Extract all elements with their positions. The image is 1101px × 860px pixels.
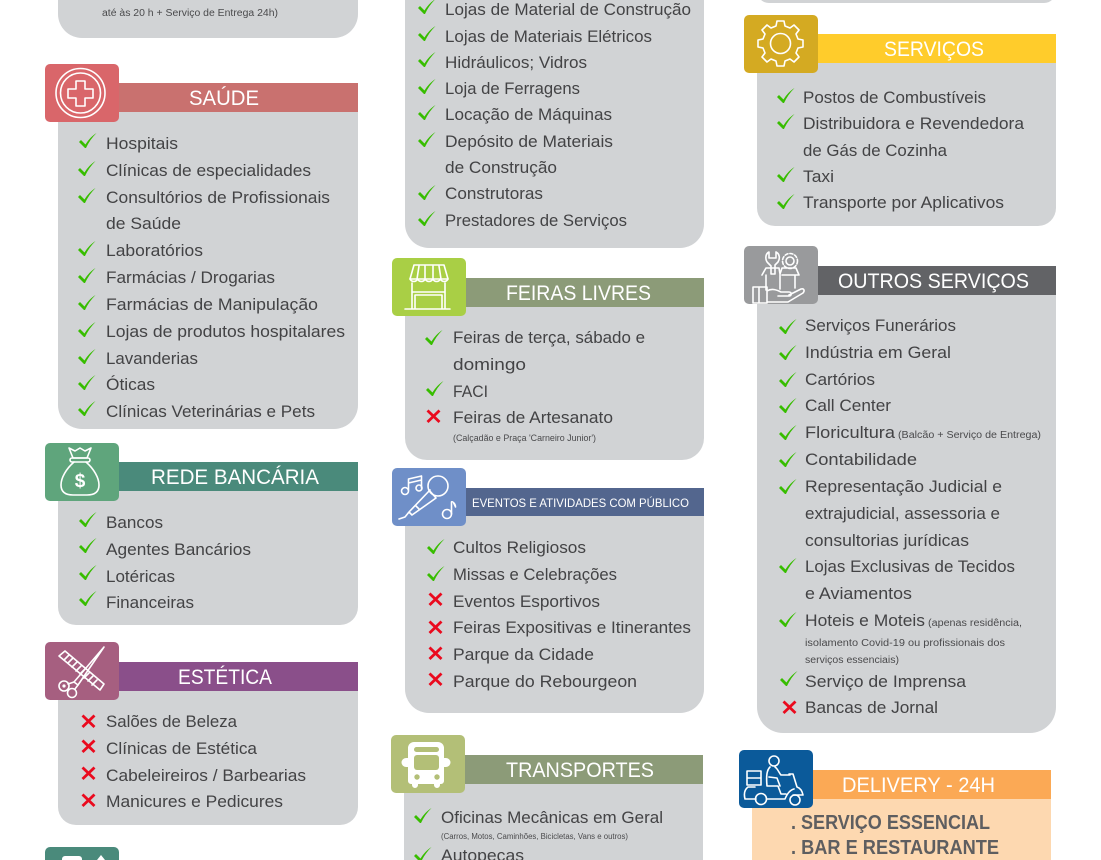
- panel: saúde: [45, 64, 358, 429]
- list: outros serviços items: [779, 316, 1041, 717]
- list: eventos items: [427, 538, 691, 691]
- list: transportes items: (Carros, Motos, Caminhões, Bicicletas, Vans e outros): [441, 832, 628, 841]
- list: outros serviços items: isolamento Covid-19 ou profissionais dos: [805, 638, 1005, 649]
- list: construção items: Loja de Ferragens: [445, 79, 580, 98]
- heading banner: saúde: SAÚDE: [189, 87, 259, 110]
- list: rede bancária items: Financeiras: [106, 593, 194, 612]
- heading banner: rede bancária: [119, 462, 358, 491]
- list: transportes items: [414, 808, 663, 860]
- text: delivery essentials: . SERVIÇO ESSENCIAL: [791, 811, 990, 834]
- panel: top of right column (cropped): [757, 0, 1056, 3]
- list: estética items: Salões de Beleza: [106, 712, 238, 731]
- heading banner: estética: [119, 662, 358, 691]
- list: rede bancária items: Lotéricas: [106, 567, 175, 586]
- icon: scissors and comb: [45, 642, 119, 700]
- list: saúde items: Farmácias de Manipulação: [106, 295, 318, 314]
- panel: transportes: [391, 735, 703, 860]
- list: serviços items: Postos de Combustíveis: [803, 88, 986, 107]
- heading banner: serviços: SERVIÇOS: [884, 38, 984, 61]
- icon: money bag: $: [75, 471, 86, 492]
- text: delivery essentials: [791, 811, 999, 859]
- heading banner: outros serviços: OUTROS SERVIÇOS: [838, 270, 1029, 293]
- panel: eventos: [392, 468, 704, 713]
- list: estética items: Cabeleireiros / Barbearias: [106, 766, 306, 785]
- list: outros serviços items: extrajudicial, assessoria e: [805, 504, 1000, 523]
- list: rede bancária items: [79, 512, 251, 612]
- list: feiras items: (Calçadão e Praça 'Carneiro Junior'): [453, 433, 596, 443]
- heading banner: delivery: [813, 770, 1051, 799]
- list: eventos items: Missas e Celebrações: [453, 565, 617, 584]
- list: saúde items: Farmácias / Drogarias: [106, 268, 275, 287]
- panel: comércio (top of left column): [58, 0, 358, 38]
- list: transportes items: Oficinas Mecânicas em Geral: [441, 808, 663, 827]
- list: construção items: Lojas de Material de Construção: [445, 0, 691, 19]
- list: construção items: Depósito de Materiais: [445, 132, 613, 151]
- list: outros serviços items: Lojas Exclusivas de Tecidos: [805, 557, 1015, 576]
- heading banner: eventos: [466, 488, 704, 516]
- list: feiras items: FACI: [453, 382, 488, 401]
- list: outros serviços items: Indústria em Geral: [805, 343, 951, 362]
- list: outros serviços items: Floricultura: [805, 423, 896, 442]
- list: eventos items: Parque da Cidade: [453, 645, 594, 664]
- list: outros serviços items: Cartórios: [805, 370, 875, 389]
- list: saúde items: Lojas de produtos hospitalares: [106, 322, 345, 341]
- heading banner: rede bancária: REDE BANCÁRIA: [151, 466, 319, 489]
- note: delivery hours: até às 20 h + Serviço de Entrega 24h): [102, 8, 278, 19]
- text: delivery essentials: . BAR E RESTAURANTE: [791, 836, 999, 859]
- panel: feiras livres: [392, 258, 704, 460]
- list: construção items: Construtoras: [445, 184, 543, 203]
- list: saúde items: [78, 133, 345, 421]
- list: estética items: [82, 712, 306, 811]
- list: eventos items: Feiras Expositivas e Itinerantes: [453, 618, 691, 637]
- list: outros serviços items: Hoteis e Moteis: [805, 611, 925, 630]
- list: estética items: Manicures e Pedicures: [106, 792, 283, 811]
- panel: estética: [45, 642, 358, 825]
- list: serviços items: Distribuidora e Revendedora: [803, 114, 1025, 133]
- panel: rede bancária: [45, 443, 358, 625]
- list: outros serviços items: Bancas de Jornal: [805, 698, 938, 717]
- heading banner: saúde: [119, 83, 358, 112]
- list: outros serviços items: Call Center: [805, 396, 891, 415]
- list: construção items: de Construção: [445, 158, 557, 177]
- icon: medical cross: [45, 64, 119, 122]
- panel: construção: [405, 0, 704, 248]
- icon: gear: [744, 15, 818, 73]
- icon: market stall: [392, 258, 466, 316]
- heading banner: estética: ESTÉTICA: [178, 666, 272, 689]
- panel: outros serviços: [744, 246, 1056, 733]
- list: saúde items: Óticas: [106, 375, 155, 394]
- list: saúde items: Clínicas Veterinárias e Pets: [106, 402, 315, 421]
- list: outros serviços items: serviços essenciais): [805, 655, 899, 666]
- list: estética items: Clínicas de Estética: [106, 739, 258, 758]
- list: outros serviços items: Contabilidade: [805, 450, 917, 469]
- panel: serviços: [744, 15, 1056, 226]
- icon: bus: [391, 735, 465, 793]
- list: outros serviços items: e Aviamentos: [805, 584, 912, 603]
- list: serviços items: Taxi: [803, 167, 834, 186]
- heading banner: outros serviços: [818, 266, 1056, 295]
- panel: delivery: [739, 750, 1051, 860]
- heading banner: eventos: EVENTOS E ATIVIDADES COM PÚBLICO: [472, 495, 689, 510]
- list: serviços items: Transporte por Aplicativos: [803, 193, 1004, 212]
- icon: tools box on hand: [744, 246, 818, 304]
- heading banner: transportes: TRANSPORTES: [506, 759, 654, 782]
- list: serviços items: [777, 88, 1025, 212]
- list: serviços items: de Gás de Cozinha: [803, 141, 948, 160]
- heading banner: feiras livres: [466, 278, 704, 307]
- list: rede bancária items: Agentes Bancários: [106, 540, 251, 559]
- list: outros serviços items: Serviço de Imprensa: [805, 672, 967, 691]
- list: feiras items: Feiras de Artesanato: [453, 408, 613, 427]
- list: feiras items: domingo: [453, 355, 526, 374]
- list: feiras items: [425, 328, 645, 443]
- list: saúde items: Laboratórios: [106, 241, 203, 260]
- icon: microphone and notes: [392, 468, 466, 526]
- icon: money bag: [45, 443, 119, 501]
- list: construção items: Lojas de Materiais Elétricos: [445, 27, 652, 46]
- heading banner: delivery: DELIVERY - 24H: [842, 774, 995, 797]
- list: saúde items: Consultórios de Profissionais: [106, 188, 330, 207]
- list: saúde items: Lavanderias: [106, 349, 198, 368]
- list: saúde items: de Saúde: [106, 214, 181, 233]
- list: outros serviços items: consultorias jurídicas: [805, 531, 969, 550]
- list: construção items: [418, 0, 691, 230]
- list: eventos items: Cultos Religiosos: [453, 538, 586, 557]
- list: rede bancária items: Bancos: [106, 513, 163, 532]
- list: feiras items: Feiras de terça, sábado e: [453, 328, 645, 347]
- list: construção items: Prestadores de Serviços: [445, 211, 627, 230]
- list: outros serviços items: (apenas residência,: [928, 618, 1022, 629]
- heading banner: serviços: [818, 34, 1056, 63]
- list: eventos items: Eventos Esportivos: [453, 592, 600, 611]
- list: outros serviços items: Serviços Funerários: [805, 316, 956, 335]
- list: saúde items: Clínicas de especialidades: [106, 161, 311, 180]
- list: construção items: Locação de Máquinas: [445, 105, 612, 124]
- heading banner: feiras livres: FEIRAS LIVRES: [506, 282, 651, 305]
- list: saúde items: Hospitais: [106, 134, 178, 153]
- list: outros serviços items: Representação Judicial e: [805, 477, 1002, 496]
- list: outros serviços items: (Balcão + Serviço de Entrega): [898, 430, 1041, 441]
- icon: next panel (cropped): [45, 847, 119, 860]
- icon: delivery scooter: [739, 750, 813, 808]
- list: eventos items: Parque do Rebourgeon: [453, 672, 637, 691]
- heading banner: transportes: [465, 755, 703, 784]
- list: construção items: Hidráulicos; Vidros: [445, 53, 587, 72]
